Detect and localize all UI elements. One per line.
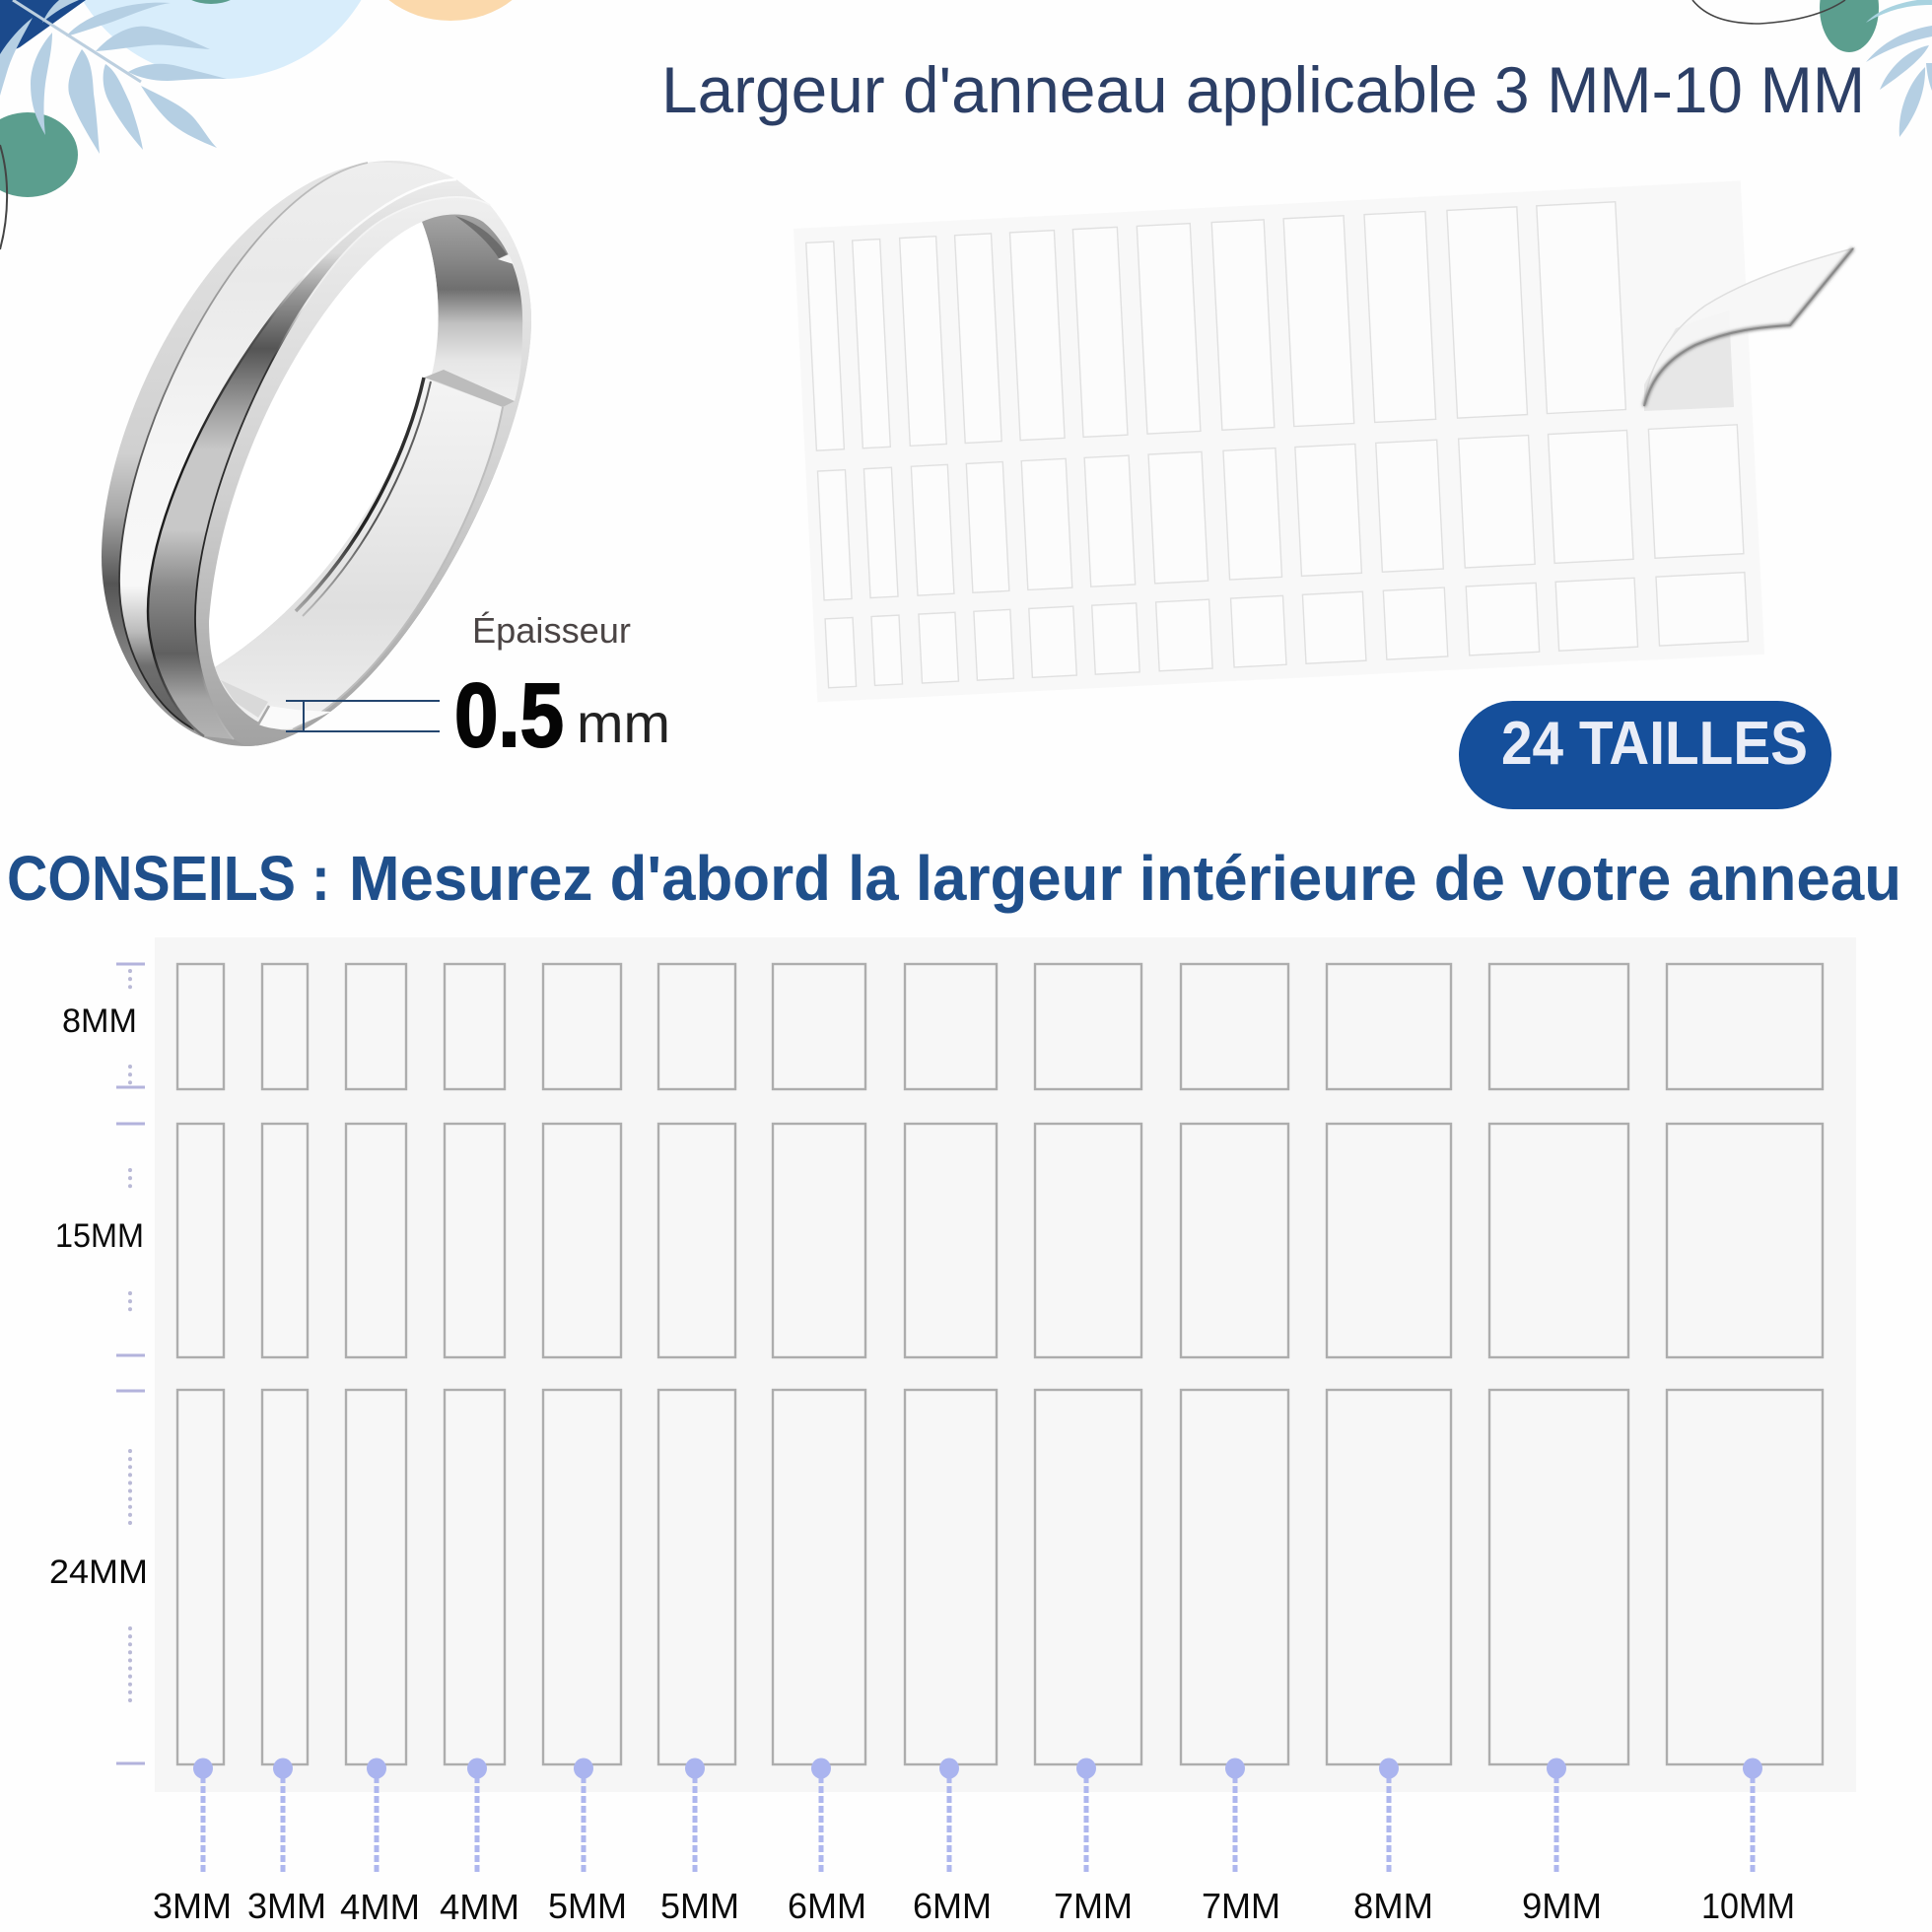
value 0.5: 0.5	[454, 665, 564, 766]
height label: 24mm: 24MM	[49, 1553, 148, 1591]
ring centre band	[119, 163, 456, 736]
ring near rim	[195, 197, 531, 746]
label: epaisseur: Épaisseur	[472, 610, 631, 651]
title: 3 MM-10 MM	[1494, 53, 1865, 126]
badge: 24 tailles: 24 TAILLES	[1501, 710, 1808, 778]
ring inner wall	[422, 215, 522, 401]
width markers: dashed lines	[203, 1776, 1753, 1875]
badge: 24 tailles	[1459, 701, 1831, 809]
width labels: 6MM	[913, 1886, 992, 1926]
chart row: 24mm	[177, 1390, 1823, 1764]
width markers: dots	[193, 1759, 1762, 1778]
width labels: 3MM	[153, 1886, 232, 1926]
height scale: ticks and dots	[116, 964, 145, 1763]
heading: conseils: CONSEILS :	[7, 843, 330, 914]
ring opening	[209, 222, 439, 667]
decoration: top-right foliage and line	[1692, 0, 1932, 137]
sheet row 2	[817, 425, 1744, 600]
width labels: 8MM	[1353, 1886, 1433, 1926]
width labels: 4MM	[440, 1887, 519, 1927]
sticker sheet	[794, 180, 1764, 702]
width labels: 7MM	[1202, 1886, 1280, 1926]
height label: 8mm: 8MM	[62, 1002, 137, 1040]
height label: 15mm: 15MM	[55, 1217, 144, 1255]
width labels: 5MM	[548, 1886, 627, 1926]
ring silhouette	[102, 161, 531, 746]
thickness marker lines	[286, 701, 440, 731]
width labels: 9MM	[1522, 1886, 1602, 1926]
unit mm: mm	[577, 692, 670, 754]
title: Largeur d'anneau applicable	[661, 53, 1478, 126]
width labels: 3MM	[247, 1886, 326, 1926]
width labels: 4MM	[340, 1887, 420, 1927]
sheet row 1	[806, 202, 1625, 450]
width labels: 6MM	[788, 1886, 866, 1926]
heading: conseils: Mesurez d'abord la largeur intérieure de votre anneau	[349, 843, 1901, 914]
chart row: 15mm	[177, 1124, 1823, 1357]
transparent liner	[215, 378, 503, 729]
decoration: top-left foliage and circles	[0, 0, 537, 249]
chart row: 8mm	[177, 964, 1823, 1089]
width labels	[153, 1886, 1795, 1927]
sheet row 3	[825, 573, 1748, 688]
ring illustration	[102, 161, 531, 746]
ring groove lines	[119, 163, 368, 729]
ring bevel band	[148, 179, 490, 739]
thickness callout	[286, 610, 670, 766]
width labels: 5MM	[660, 1886, 739, 1926]
size chart panel	[155, 937, 1856, 1792]
width labels: 10MM	[1701, 1886, 1795, 1926]
peeled sticker	[1644, 248, 1853, 411]
width labels: 7MM	[1054, 1886, 1133, 1926]
